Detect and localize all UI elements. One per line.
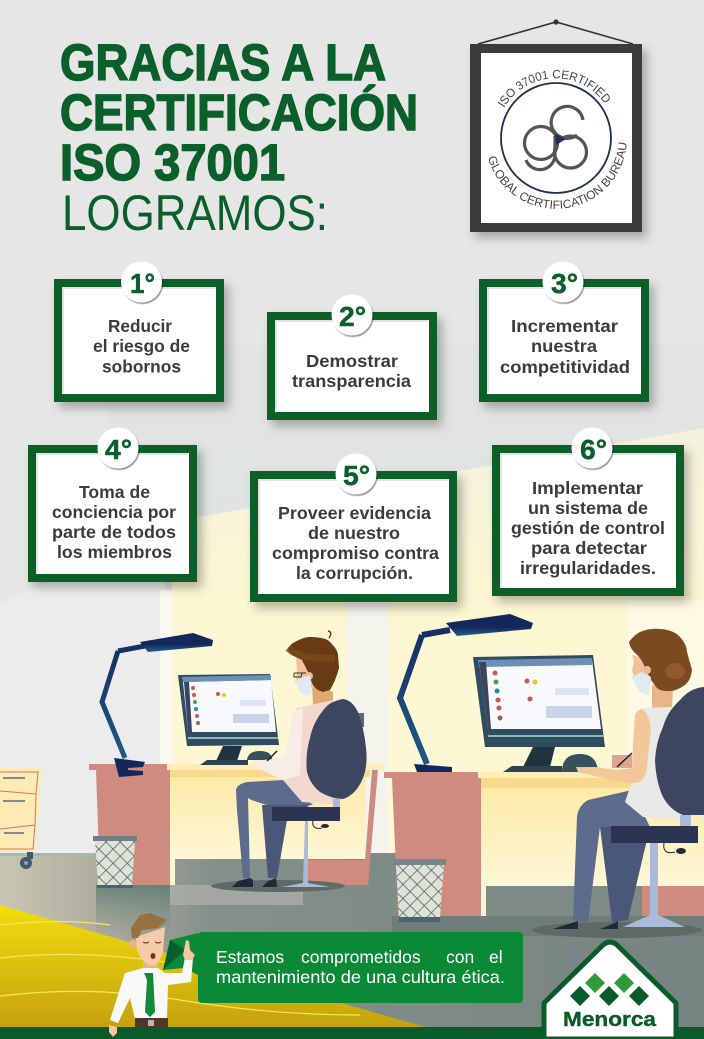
badge 4: 4°: [105, 434, 132, 465]
callout message: mantenimiento de una cultura ética.: [216, 967, 505, 987]
card 5: la corrupción.: [296, 563, 413, 583]
callout message: Estamos: [216, 947, 284, 967]
badge 6: [572, 428, 612, 468]
card 2: transparencia: [292, 371, 411, 391]
callout message: comprometidos: [301, 947, 421, 967]
presenter character: [109, 913, 198, 1037]
card 4: los miembros: [57, 542, 172, 562]
card 3: competitividad: [500, 357, 630, 377]
framed ISO certificate: ISO 37001 CERTIFIED: [498, 70, 610, 108]
monitor 2: [473, 655, 605, 772]
Menorca logo: [544, 942, 676, 1039]
badge 4: [98, 428, 138, 468]
card 4: Toma de: [79, 482, 150, 502]
desk lamp 1: [102, 633, 213, 777]
badge 5: [336, 454, 376, 494]
card 6: irregularidades.: [520, 558, 656, 578]
wastebasket 2: [393, 859, 446, 922]
card 1: [58, 262, 220, 398]
man at desk: [211, 631, 367, 892]
card 5: compromiso contra: [272, 543, 439, 563]
title: [60, 34, 418, 241]
badge 6: 6°: [580, 434, 607, 465]
title: ISO 37001: [60, 134, 285, 191]
callout message: [198, 932, 523, 1003]
card 1: sobornos: [102, 356, 181, 376]
card 6: gestión de control: [511, 518, 665, 538]
card 6: Implementar: [532, 478, 643, 498]
card 2: Demostrar: [306, 351, 398, 371]
desk 1: [89, 764, 384, 905]
card 5: [254, 454, 453, 598]
card 1: el riesgo de: [93, 336, 190, 356]
callout message: el: [489, 947, 503, 967]
badge 2: [332, 294, 372, 336]
title: GRACIAS A LA: [60, 34, 386, 91]
badge 5: 5°: [343, 460, 370, 491]
card 4: parte de todos: [52, 522, 176, 542]
badge 3: 3°: [551, 268, 578, 299]
Menorca logo: Menorca: [563, 1009, 657, 1031]
woman at desk: [532, 629, 704, 938]
desk lamp 2: [400, 614, 533, 772]
wastebasket 1: [93, 836, 137, 888]
card 4: conciencia por: [52, 502, 176, 522]
framed ISO certificate: GLOBAL CERTIFICATION BUREAU: [488, 142, 627, 209]
card 2: [271, 294, 433, 416]
badge 3: [542, 262, 584, 302]
badge 1: 1°: [130, 268, 155, 299]
card 3: nuestra: [531, 336, 597, 356]
drawer cabinet: [0, 768, 42, 869]
card 3: [483, 262, 645, 398]
title: CERTIFICACIÓN: [60, 84, 418, 141]
desk 2: [384, 772, 704, 936]
title: LOGRAMOS:: [62, 185, 328, 241]
card 5: Proveer evidencia: [278, 503, 431, 523]
card 5: de nuestro: [308, 523, 400, 543]
card 6: un sistema de: [528, 498, 648, 518]
callout message: con: [446, 947, 474, 967]
card 3: Incrementar: [511, 316, 618, 336]
framed ISO certificate: [470, 19, 652, 244]
monitor 1: [178, 674, 279, 765]
card 1: Reducir: [108, 316, 172, 336]
yellow carpet: [0, 905, 425, 1027]
card 4: [32, 428, 193, 578]
card 6: para detectar: [531, 538, 647, 558]
badge 2: 2°: [339, 301, 366, 332]
card 6: [496, 428, 680, 592]
badge 1: [121, 262, 162, 302]
